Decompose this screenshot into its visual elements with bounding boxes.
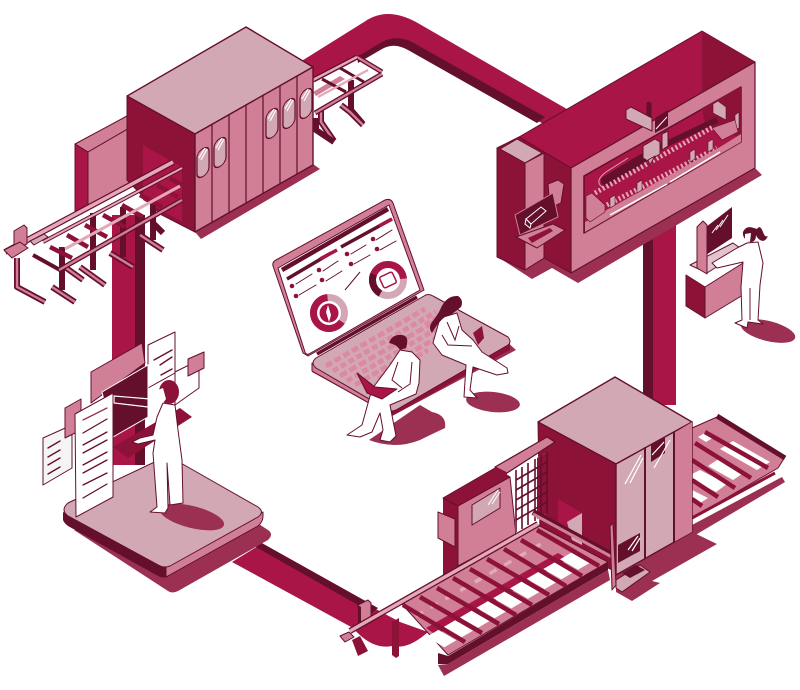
donut chart left [307, 291, 351, 335]
donut chart right [367, 259, 409, 301]
cutting window [584, 87, 741, 233]
laser bed stripes [595, 127, 713, 193]
conveyor crossbars [50, 178, 182, 258]
cutter top inside [519, 31, 755, 168]
operator figure [712, 227, 768, 328]
floor shadow [195, 164, 320, 239]
conveyor end near bottom-left [340, 600, 399, 658]
furnace door panels [195, 67, 313, 232]
press shadow [616, 532, 717, 601]
foot pedal and post [610, 523, 650, 592]
chart link line [345, 272, 360, 290]
near conveyor with legs [4, 162, 182, 302]
press control panel [438, 437, 555, 578]
furnace end face with opening [127, 96, 195, 232]
conveyor light slats [416, 540, 548, 616]
window floor [585, 134, 741, 232]
press front doors [616, 422, 692, 575]
rear conveyor [692, 416, 785, 537]
laptop hinge [317, 297, 417, 354]
work platform with operator [43, 332, 271, 592]
laptop shadow [320, 340, 516, 416]
operator station right [686, 207, 798, 347]
dashboard list rows [296, 230, 396, 295]
operator terminal [515, 180, 565, 248]
press top [538, 377, 692, 464]
platform operator [132, 380, 183, 513]
furnace top [127, 27, 313, 134]
platform body [63, 512, 168, 578]
console cabinet [686, 275, 705, 318]
machine shadow [498, 168, 762, 283]
conveyor far rail [533, 512, 612, 557]
seated man [347, 335, 420, 442]
laptop screen [273, 199, 424, 356]
laptop base [312, 340, 510, 416]
keyboard keys [326, 309, 450, 385]
machine: bottom-right press [438, 377, 785, 601]
backdrop panel [91, 343, 145, 403]
big front conveyor [350, 512, 650, 676]
seated woman [430, 296, 508, 398]
control pillar [500, 139, 544, 270]
press side [538, 422, 616, 572]
machine: top-right laser cutter [497, 31, 762, 283]
safety grid [515, 452, 548, 532]
work desk [113, 408, 192, 458]
conveyor crossbars [403, 530, 599, 642]
platform top [64, 457, 262, 567]
left documents [43, 393, 113, 517]
platform shadow of person [157, 498, 227, 536]
cutter front face [571, 62, 755, 273]
conveyor white gaps [426, 552, 590, 647]
dashboard bars [282, 209, 392, 279]
centre laptop scene [273, 199, 521, 445]
gantry and cutting head [626, 104, 668, 165]
machine: top-left furnace [4, 27, 382, 302]
dark work screen [102, 365, 148, 437]
back documents [148, 332, 204, 405]
ring pipe connecting the stations [112, 14, 676, 647]
cutter side wall [497, 137, 571, 273]
furnace windows [197, 86, 312, 180]
console monitor [706, 207, 732, 255]
far conveyor of furnace [313, 57, 382, 142]
press opening [558, 499, 582, 545]
window highlights [199, 89, 310, 160]
rear column [75, 116, 138, 152]
console shelf [690, 243, 743, 273]
platform shadow [74, 515, 271, 592]
conveyor top rail [350, 524, 538, 631]
shadow right [738, 315, 798, 347]
